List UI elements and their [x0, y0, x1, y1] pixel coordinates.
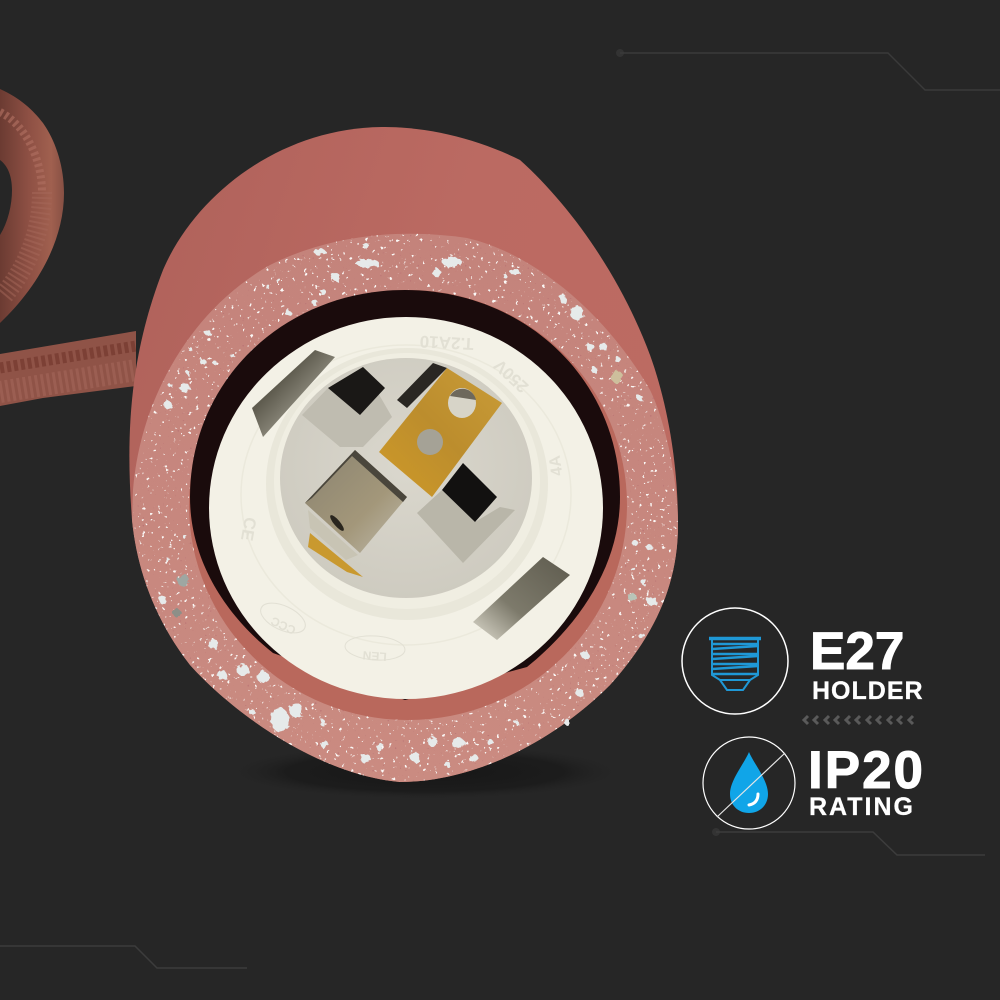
embossed socket markings: 250V — [490, 355, 532, 397]
icon: E27 bulb base — [682, 608, 788, 714]
ledge upper left — [302, 367, 392, 447]
loop braid highlight — [0, 112, 42, 192]
ledge lower right — [417, 490, 515, 563]
brass tab — [308, 533, 363, 577]
label: IP20 rating: IP20 — [808, 741, 925, 800]
black block upper left — [328, 367, 385, 415]
strike-through line — [717, 753, 785, 817]
label: IP20 rating: RATING — [809, 793, 915, 821]
socket ring shading — [241, 345, 571, 645]
white socket ring — [209, 317, 603, 699]
socket cavity — [280, 358, 532, 598]
black block upper middle — [397, 363, 447, 408]
embossed socket markings: CCC — [268, 614, 298, 637]
braided cable — [0, 89, 136, 406]
metal contact — [305, 450, 407, 577]
decorative circuit line: bottom left — [0, 946, 247, 968]
grey and yellow flecks — [173, 371, 636, 617]
brass terminal — [379, 368, 502, 497]
water drop — [730, 752, 768, 813]
floor shadow under holder — [225, 744, 625, 800]
label: E27 holder — [810, 622, 924, 705]
concrete body — [129, 127, 678, 782]
dark inner gap — [190, 290, 620, 700]
label: E27 holder: HOLDER — [812, 677, 924, 705]
upper bayonet slot — [252, 350, 335, 437]
large silver flecks — [159, 243, 657, 767]
cable run into the body — [0, 331, 136, 406]
decorative circuit line: top right — [616, 49, 1000, 90]
terracotta inner bevel — [189, 290, 627, 720]
socket step — [266, 348, 548, 620]
chevron divider — [804, 716, 913, 724]
icon: no water protection — [703, 737, 795, 829]
decorative circuit line: bottom right — [712, 828, 985, 855]
black block lower right — [442, 463, 497, 522]
drop highlight — [749, 794, 758, 805]
embossed socket markings: 4A — [547, 454, 566, 477]
speckled front rim — [132, 234, 678, 782]
embossed socket markings: LEN — [362, 648, 387, 664]
label: E27 holder: E27 — [810, 622, 904, 681]
lower bayonet slot — [473, 557, 570, 640]
embossed socket markings: T.2A10 — [419, 332, 474, 353]
embossed socket markings: CE — [237, 516, 260, 542]
cable loop — [0, 89, 64, 323]
lamp holder photo — [129, 127, 678, 782]
embossed socket markings — [237, 332, 566, 664]
